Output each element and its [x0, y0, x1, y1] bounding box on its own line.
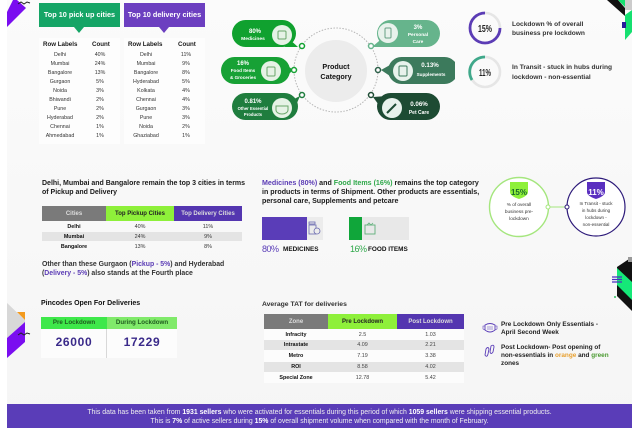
table: average TAT: 3.38 [425, 353, 436, 359]
text: top cities summary: of Pickup and Delivery [42, 189, 117, 196]
text: lockdown share description: Lockdown % of overall [512, 20, 583, 28]
table: top 10 pick up cities: 5% [96, 79, 104, 85]
circle: 15%: business pre- [505, 209, 534, 214]
table: top 10 pick up cities: Gurgaon [50, 79, 70, 85]
table: top 10 delivery cities: 2% [182, 124, 190, 130]
table: top 10 delivery cities: Hyderabad [133, 79, 159, 85]
footer banner: This data has been taken from 1931 sellers who were activated for essentials during this period of which 1059 sellers were shipping essential products. [87, 409, 552, 416]
table: top 10 delivery cities: Noida [139, 124, 153, 130]
table: top 10 pick up cities: Noida [53, 88, 67, 94]
table: pincodes [41, 317, 177, 358]
icon: groceries [364, 222, 376, 234]
table: average TAT: Infracity [286, 332, 306, 338]
pill: food items and groceries [221, 57, 296, 84]
pill: supplements: Supplements [417, 72, 446, 77]
pill: other essential products: Other Essential [238, 106, 268, 111]
table: top 10 pick up cities: Hyderabad [47, 115, 73, 121]
bar: food items 16%: FOOD ITEMS [368, 246, 408, 253]
table: top cities: 24% [135, 234, 145, 240]
table: top cities [42, 206, 242, 250]
text: post lockdown legend: Post Lockdown- Post opening of [501, 344, 600, 351]
arrow: connector [548, 206, 567, 208]
table: top cities: Cities [66, 210, 82, 216]
table: top cities: Bangalore [61, 244, 87, 250]
circle: 11% [565, 178, 625, 236]
table: top cities: 8% [204, 244, 212, 250]
heading: average TAT for deliveries: Average TAT for deliveries [262, 301, 347, 308]
table: top 10 pick up cities: 40% [95, 52, 105, 58]
icon: footprints [484, 344, 494, 357]
circle: 15% [490, 178, 550, 236]
text: top category summary: in products in terms of Shipment. Other products are essentials, [262, 188, 479, 196]
pill: other essential products: Products [244, 112, 263, 117]
text: top cities summary [42, 180, 245, 196]
heading: top 10 pick up cities: Top 10 pick up cities [44, 10, 115, 19]
table: top 10 delivery cities: 5% [182, 79, 190, 85]
table: average TAT: Zone [289, 318, 303, 324]
table: top 10 delivery cities: 9% [182, 61, 190, 67]
table: top 10 pick up cities: 2% [96, 115, 104, 121]
table: average TAT: 1.03 [425, 332, 436, 338]
icon: face mask [482, 323, 498, 332]
circle: 11%: 11% [588, 188, 604, 197]
pill: personal care [368, 20, 440, 48]
hub circle: Category [320, 72, 352, 81]
table: average TAT: Pre Lockdown [342, 318, 383, 324]
icon: medicine box [308, 222, 320, 234]
table: average TAT: 4.09 [357, 342, 368, 348]
table: top 10 delivery cities: Count [178, 41, 196, 48]
table: top 10 pick up cities: Delhi [54, 52, 66, 58]
decoration: right middle ribbon [612, 257, 632, 311]
text: top category summary [262, 178, 479, 205]
heading: top 10 delivery cities: Top 10 delivery cities [128, 10, 201, 19]
circle: 11%: in hubs during [582, 208, 611, 213]
table: top 10 delivery cities: Kolkata [137, 88, 155, 94]
text: post lockdown legend: zones [501, 360, 519, 367]
pill: personal care: 3% [414, 25, 423, 31]
heading: top 10 delivery cities [124, 3, 205, 33]
circle: 11%: In Transit - stuck [579, 201, 613, 206]
pill: medicines: 80% [249, 29, 262, 35]
pill: pet care [368, 92, 440, 120]
table: top 10 pick up cities: Chennai [50, 124, 70, 130]
table: average TAT: 5.42 [425, 374, 436, 380]
table: top 10 delivery cities: 3% [182, 115, 190, 121]
pill: pet care: 0.06% [410, 101, 428, 108]
table: top 10 delivery cities: 1% [182, 133, 190, 139]
table: top 10 pick up cities: Ahmedabad [46, 133, 74, 139]
donut: 15% lockdown share [468, 12, 502, 44]
table: average TAT: 2.21 [425, 342, 436, 348]
table: top cities: Top Pickup Cities [115, 210, 165, 216]
text: top category summary: personal care, Supplements and petcare [262, 197, 398, 205]
table: average TAT: Metro [289, 353, 303, 359]
table: top 10 pick up cities: Pune [54, 106, 66, 112]
table: top 10 pick up cities: Bangalore [48, 70, 72, 76]
footer banner: This is 7% of active sellers during 15% of overall shipment volume when compared with the month of February. [150, 418, 489, 425]
circle: 11%: non-essential [583, 222, 609, 227]
chart: product category hub diagram [221, 20, 455, 120]
circle: 15%: lockdown [509, 216, 529, 221]
hub circle [294, 28, 378, 112]
pill: pet care: Pet Care [409, 110, 429, 116]
text: top category summary: Medicines (80%) and Food Items (16%) remains the top category [262, 178, 479, 186]
table: average TAT [264, 314, 464, 380]
table: top 10 delivery cities: Gurgaon [136, 106, 156, 112]
text: top cities summary: Delhi, Mumbai and Bangalore remain the top 3 cities in terms [42, 180, 245, 187]
table: average TAT: 7.19 [357, 353, 368, 359]
decoration: top left ribbon [7, 0, 30, 27]
table: top 10 pick up cities: 1% [96, 133, 104, 139]
table: average TAT: 8.58 [357, 364, 368, 370]
table: top 10 delivery cities: 11% [181, 52, 191, 58]
pill: food items and groceries: 16% [237, 61, 250, 67]
pill: food items and groceries: & Groceries [230, 75, 256, 80]
table: top cities: 13% [135, 244, 145, 250]
circle: 15%: 15% [511, 188, 527, 197]
table: top 10 pick up cities: 3% [96, 88, 104, 94]
table: average TAT: ROI [291, 364, 301, 370]
bar: food items 16%: 16% [350, 244, 367, 254]
decoration: left lower ribbon [7, 303, 30, 358]
table: top 10 delivery cities: 8% [182, 70, 190, 76]
text: fourth place note: Other than these Gurgaon (Pickup - 5%) and Hyderabad [42, 261, 224, 268]
table: top 10 pick up cities: 2% [96, 97, 104, 103]
pill: other essential products [232, 92, 304, 120]
donut: 15% lockdown share: 15% [478, 24, 492, 35]
table: top 10 delivery cities: 4% [182, 97, 190, 103]
decoration: top right ribbon [607, 0, 632, 40]
table: top cities: 9% [204, 234, 212, 240]
text: pre lockdown legend [501, 320, 598, 336]
table: average TAT: Special Zone [279, 374, 313, 380]
table: average TAT: 2.5 [359, 332, 366, 338]
pill: personal care: Care [413, 39, 424, 45]
table: top 10 pick up cities: Mumbai [51, 61, 69, 67]
text: in transit description: In Transit - stuck in hubs during [512, 64, 612, 71]
table: top cities: Top Delivery Cities [181, 210, 235, 216]
table: top 10 pick up cities: 24% [95, 61, 105, 67]
text: post lockdown legend [501, 344, 609, 367]
table: top 10 delivery cities: 4% [182, 88, 190, 94]
table: top 10 pick up cities: 13% [95, 70, 105, 76]
table: top 10 delivery cities [124, 38, 205, 144]
table: top 10 delivery cities: Delhi [140, 52, 152, 58]
text: pre lockdown legend: Pre Lockdown Only Essentials - [501, 320, 598, 328]
bar: medicines 80%: 80% [262, 244, 279, 254]
table: top 10 pick up cities: 2% [96, 106, 104, 112]
table: top 10 pick up cities: Bhiwandi [49, 97, 71, 103]
table: pincodes: 26000 [56, 335, 92, 349]
table: top 10 pick up cities: 1% [96, 124, 104, 130]
table: average TAT: 12.78 [356, 374, 369, 380]
text: lockdown share description: business pre lockdown [512, 30, 585, 37]
circle: 11%: lockdown - [585, 215, 607, 220]
chart: 15% and 11% linked circles [488, 176, 626, 238]
hub circle: Product [322, 62, 350, 71]
heading: pincodes open for deliveries: Pincodes Open For Deliveries [41, 300, 140, 307]
table: average TAT: Post Lockdown [408, 318, 453, 324]
table: top 10 delivery cities: Row Labels [128, 41, 162, 48]
pill: supplements: 0.13% [421, 62, 439, 69]
pill: food items and groceries: Food Items [231, 68, 256, 73]
bar: food items 16% [349, 217, 409, 254]
table: pincodes: During Lockdown [116, 319, 168, 326]
table: top cities: 40% [135, 224, 145, 230]
table: top 10 delivery cities: 3% [182, 106, 190, 112]
pill: supplements [376, 57, 458, 84]
table: top 10 delivery cities: Mumbai [137, 61, 155, 67]
table: top 10 delivery cities: Ghaziabad [133, 133, 159, 139]
bar: medicines 80%: MEDICINES [283, 246, 319, 253]
table: top cities: Mumbai [64, 234, 84, 240]
text: post lockdown legend: non-essentials in orange and green [501, 352, 609, 359]
text: pre lockdown legend: April Second Week [501, 329, 559, 336]
bar: medicines 80% [262, 217, 323, 254]
circle: 15%: % of overall [507, 202, 531, 207]
table: top 10 delivery cities: Chennai [136, 97, 156, 103]
text: fourth place note: (Delivery - 5%) also stands at the Fourth place [42, 270, 193, 277]
table: top 10 delivery cities: Bangalore [134, 70, 158, 76]
table: top 10 delivery cities: Pune [140, 115, 152, 121]
pill: other essential products: 0.81% [244, 99, 262, 105]
pill: personal care: Personal [408, 32, 428, 38]
donut: 11% in transit [468, 56, 502, 88]
table: top cities: Delhi [67, 224, 81, 230]
donut: 11% in transit: 11% [479, 68, 491, 79]
text: in transit description: lockdown - non-essential [512, 74, 591, 80]
text: lockdown share description [512, 20, 585, 37]
heading: top 10 pick up cities [39, 3, 120, 33]
table: top 10 pick up cities: Count [92, 41, 110, 48]
table: pincodes: Pre Lockdown [53, 319, 95, 326]
table: pincodes: 17229 [124, 335, 160, 349]
pill: medicines [232, 20, 304, 48]
table: top 10 pick up cities [39, 38, 120, 144]
text: in transit description [512, 64, 612, 80]
table: average TAT: 4.02 [425, 364, 436, 370]
table: average TAT: Intrastate [284, 342, 308, 348]
table: top cities: 11% [203, 224, 213, 230]
pill: medicines: Medicines [241, 36, 265, 42]
table: top 10 pick up cities: Row Labels [43, 41, 77, 48]
footer banner [7, 404, 632, 428]
text: fourth place note [42, 260, 224, 277]
